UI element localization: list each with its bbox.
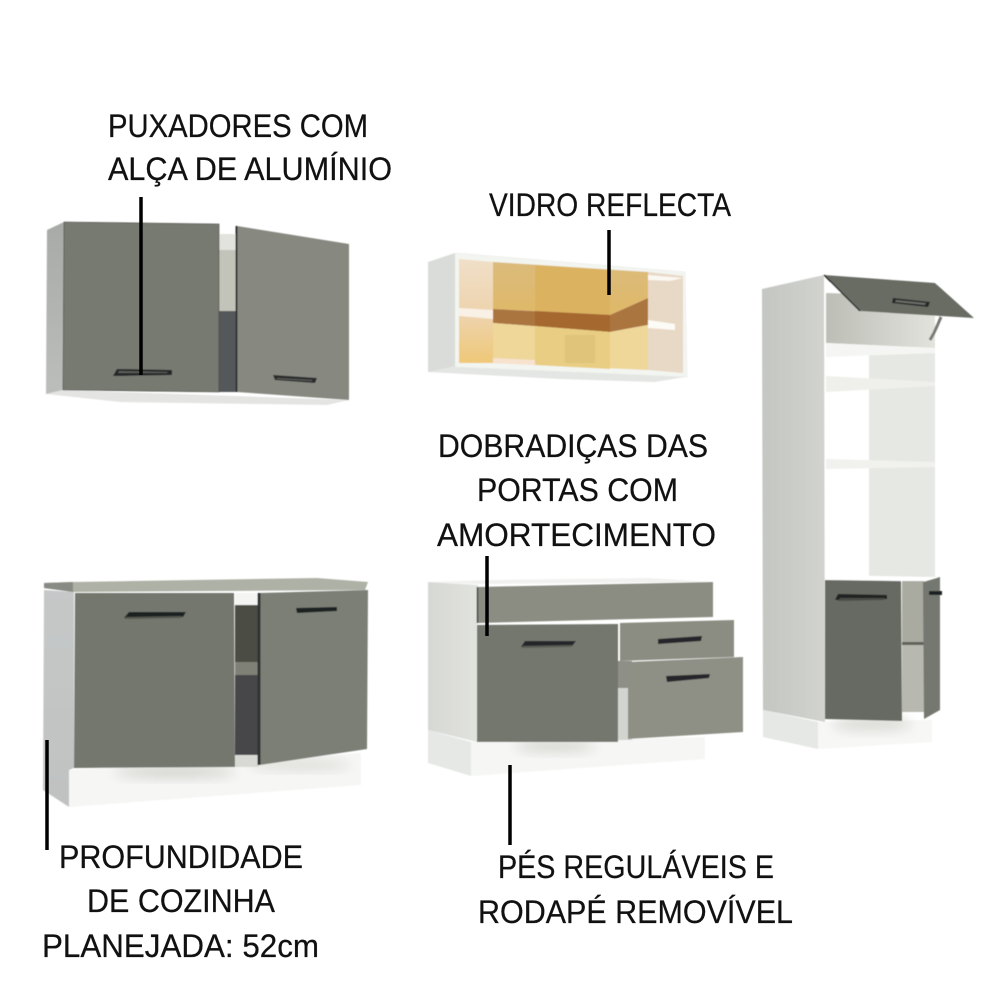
- base plinth: [69, 753, 361, 807]
- shelves: [826, 343, 935, 357]
- label: feet: [478, 849, 793, 930]
- glass pane: [459, 259, 683, 373]
- callout line: glass: [607, 230, 611, 295]
- open drawer interior: [618, 661, 632, 740]
- base side panel: [43, 590, 74, 807]
- glass wall cabinet: [428, 253, 687, 382]
- base cabinet with two doors: [43, 578, 368, 807]
- left door: [74, 593, 235, 768]
- lower drawer: [628, 657, 743, 739]
- left door: [63, 222, 219, 392]
- label: depth: PROFUNDIDADE: [59, 839, 303, 875]
- flap door handle: [892, 298, 930, 307]
- label: depth: [42, 839, 319, 964]
- label: handles: ALÇA DE ALUMÍNIO: [108, 151, 392, 187]
- lower right door: [923, 577, 940, 719]
- upper drawer handle: [658, 636, 702, 644]
- callout line: depth: [45, 740, 49, 850]
- callout line: hinges: [485, 556, 489, 636]
- label: feet: RODAPÉ REMOVÍVEL: [478, 894, 793, 930]
- right door: [237, 226, 349, 400]
- right door handle: [273, 375, 317, 383]
- left door handle: [124, 612, 186, 619]
- label: handles: [108, 108, 392, 187]
- label: depth: PLANEJADA: 52cm: [42, 928, 319, 964]
- callout line: handles: [139, 197, 143, 375]
- door handle: [521, 641, 576, 648]
- right door handle: [929, 591, 942, 595]
- label: hinges: AMORTECIMENTO: [437, 517, 716, 553]
- label: handles: PUXADORES COM: [108, 108, 368, 144]
- lower left door: [825, 580, 902, 721]
- cabinet side: [428, 582, 478, 742]
- countertop: [44, 578, 368, 592]
- tower side panel: [762, 275, 825, 722]
- cabinet plinth: [428, 730, 705, 776]
- lift-up flap door: [824, 275, 974, 318]
- top drawer: [478, 582, 713, 623]
- cabinet side panel: [46, 222, 64, 394]
- label: depth: DE COZINHA: [87, 883, 276, 919]
- tower interior: [825, 283, 937, 712]
- flap arm: [930, 317, 941, 340]
- base cabinet with door and drawers: [428, 578, 743, 776]
- base interior: [235, 593, 259, 767]
- door: [477, 624, 618, 742]
- left door handle: [113, 369, 172, 376]
- cabinet interior: [219, 234, 237, 392]
- right door handle: [296, 607, 337, 613]
- wall cabinet with two doors: [46, 222, 349, 405]
- callout line: feet: [508, 765, 512, 845]
- right door: [260, 590, 368, 765]
- glass cabinet side: [428, 253, 455, 372]
- label: feet: PÉS REGULÁVEIS E: [498, 849, 774, 885]
- tall oven tower cabinet: [762, 275, 974, 749]
- lower door handle: [835, 594, 887, 601]
- cabinet top: [428, 578, 713, 584]
- label: hinges: DOBRADIÇAS DAS: [438, 428, 708, 464]
- lower drawer handle: [666, 674, 710, 682]
- label: hinges: PORTAS COM: [477, 472, 678, 508]
- upper drawer: [620, 620, 734, 661]
- label: glass: VIDRO REFLECTA: [489, 187, 732, 223]
- tower plinth: [763, 710, 932, 749]
- cabinet frame: [455, 253, 687, 377]
- label: hinges: [437, 428, 716, 553]
